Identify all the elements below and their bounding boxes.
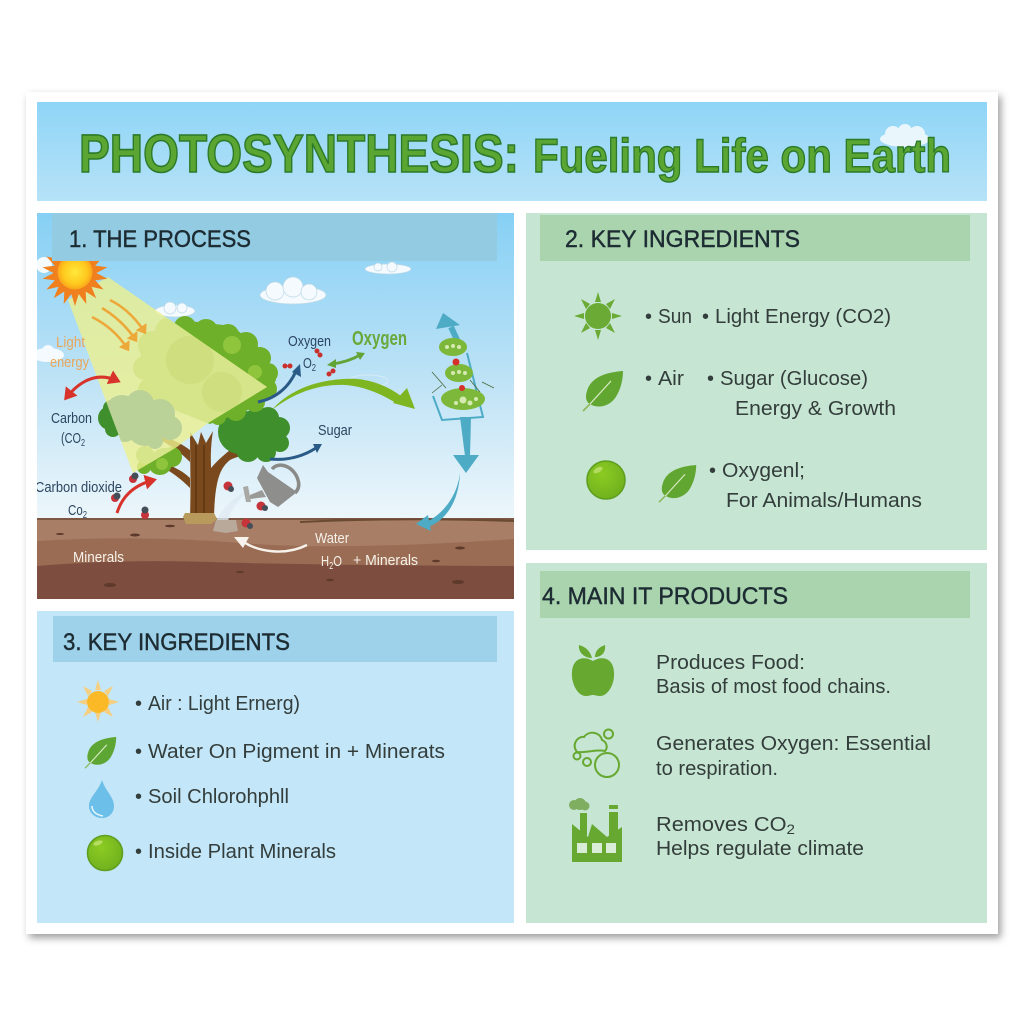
text: sun and light: •: [645, 306, 652, 328]
icon: leaf: [659, 465, 696, 502]
heading 2: 2. KEY INGREDIENTS: [565, 226, 800, 253]
diagram labels: [35, 328, 418, 572]
green oxygen double arrow: [327, 352, 365, 368]
panel 1: the process: [32, 213, 514, 599]
text: oxygen: For Animals/Humans: [726, 490, 922, 512]
sun: [42, 256, 108, 306]
diagram labels: 2: [81, 438, 85, 449]
diagram labels: Minerals: [73, 549, 124, 566]
chloroplast stack with blue cycle arrows: [416, 313, 494, 531]
text: air and sugar: •: [707, 368, 714, 390]
text: sun and light: •: [702, 306, 709, 328]
text: water: •: [135, 741, 142, 763]
diagram labels: Sugar: [318, 422, 352, 439]
pale foliage under the light: [107, 318, 267, 464]
text: inside plant: Inside Plant Minerals: [148, 841, 336, 863]
clouds: [32, 257, 411, 387]
red arrows: [66, 377, 154, 513]
panel 3: key ingredients: [37, 611, 514, 923]
text: removes co2: Helps regulate climate: [656, 838, 864, 860]
diagram labels: Oxygen: [352, 328, 407, 350]
diagram labels: O: [303, 355, 315, 372]
text: air and sugar: [645, 368, 896, 420]
icon: green circle: [88, 836, 122, 870]
heading 3: 3. KEY INGREDIENTS: [63, 629, 290, 656]
icon: apple: [572, 645, 614, 696]
text: removes co2: Removes CO: [656, 814, 776, 836]
text: water: Water On Pigment in + Minerats: [148, 741, 445, 763]
diagram labels: energy: [50, 354, 89, 371]
water stream and splash: [216, 500, 240, 520]
icon: sun: [77, 680, 119, 722]
diagram labels: 2: [83, 510, 87, 521]
diagram labels: + Minerals: [353, 552, 418, 569]
diagram labels: Carbon dioxide: [35, 479, 122, 496]
text: generates oxygen: to respiration.: [656, 758, 778, 780]
icon: water drop: [89, 780, 114, 818]
text: generates oxygen: [656, 733, 931, 780]
text: air and sugar: Energy & Growth: [735, 398, 896, 420]
orange light arrows: [92, 300, 144, 348]
text: air and sugar: Sugar (Glucose): [720, 368, 868, 390]
diagram labels: (CO: [61, 430, 88, 447]
diagram labels: 2: [329, 561, 334, 572]
text: generates oxygen: Generates Oxygen: Essential: [656, 733, 931, 755]
icon: oxygen bubbles: [574, 730, 619, 777]
carbon dioxide molecules: [111, 472, 268, 529]
title banner: [37, 102, 987, 201]
text: air: •: [135, 693, 142, 715]
big green arrow: [272, 379, 415, 410]
ground: [37, 518, 514, 599]
header bar 1: [52, 213, 497, 261]
panel 2: key ingredients: [526, 213, 987, 550]
text: produces food: Produces Food:: [656, 652, 805, 674]
text: oxygen: [709, 460, 922, 512]
oxygen molecules: [282, 348, 336, 376]
text: sun and light: Sun: [658, 306, 692, 328]
text: inside plant: •: [135, 841, 142, 863]
foliage: [98, 400, 290, 462]
diagram labels: Light: [56, 334, 86, 351]
icon: green circle: [587, 461, 625, 499]
text: soil: Soil Chlorohphll: [148, 786, 289, 808]
header bar 4: [540, 571, 970, 618]
diagram labels: O: [333, 553, 342, 570]
text: sun and light: Light Energy (CO2): [715, 306, 891, 328]
blue arrows: [258, 364, 322, 459]
white water arrow: [234, 537, 307, 552]
cloud in title banner: [880, 124, 930, 147]
subtitle: Fueling Life on Earth: [533, 129, 951, 182]
light cone: [68, 277, 267, 473]
diagram labels: H: [321, 553, 332, 570]
icon: factory: [569, 798, 622, 862]
diagram labels: Carbon: [51, 410, 92, 427]
text: air and sugar: Air: [658, 368, 684, 390]
panel 4: main products: [526, 563, 987, 923]
text: soil: •: [135, 786, 142, 808]
text: air and sugar: •: [645, 368, 652, 390]
text: oxygen: Oxygenl;: [722, 460, 805, 482]
title: PHOTOSYNTHESIS:: [79, 124, 519, 184]
branches and trunk: [190, 431, 238, 514]
header bar 2: [540, 215, 970, 261]
card background: [26, 92, 998, 934]
text: removes co2: [656, 814, 864, 860]
heading 4: 4. MAIN IT PRODUCTS: [542, 583, 788, 610]
diagram labels: Water: [315, 530, 349, 547]
text: produces food: Basis of most food chains.: [656, 676, 891, 698]
text: produces food: [656, 652, 891, 698]
icon: leaf: [85, 737, 116, 768]
diagram labels: 2: [312, 363, 316, 374]
text: air: Air : Light Ernerg): [148, 693, 300, 715]
tree: [98, 316, 290, 524]
diagram labels: Oxygen: [288, 333, 331, 350]
watering can: [243, 465, 299, 507]
diagram labels: Co: [68, 502, 87, 519]
icon: leaf: [583, 371, 623, 411]
icon: green sun: [574, 292, 622, 340]
header bar 3: [53, 616, 497, 662]
text: oxygen: •: [709, 460, 716, 482]
heading 1: 1. THE PROCESS: [69, 226, 251, 253]
text: removes co2: 2: [787, 821, 795, 837]
